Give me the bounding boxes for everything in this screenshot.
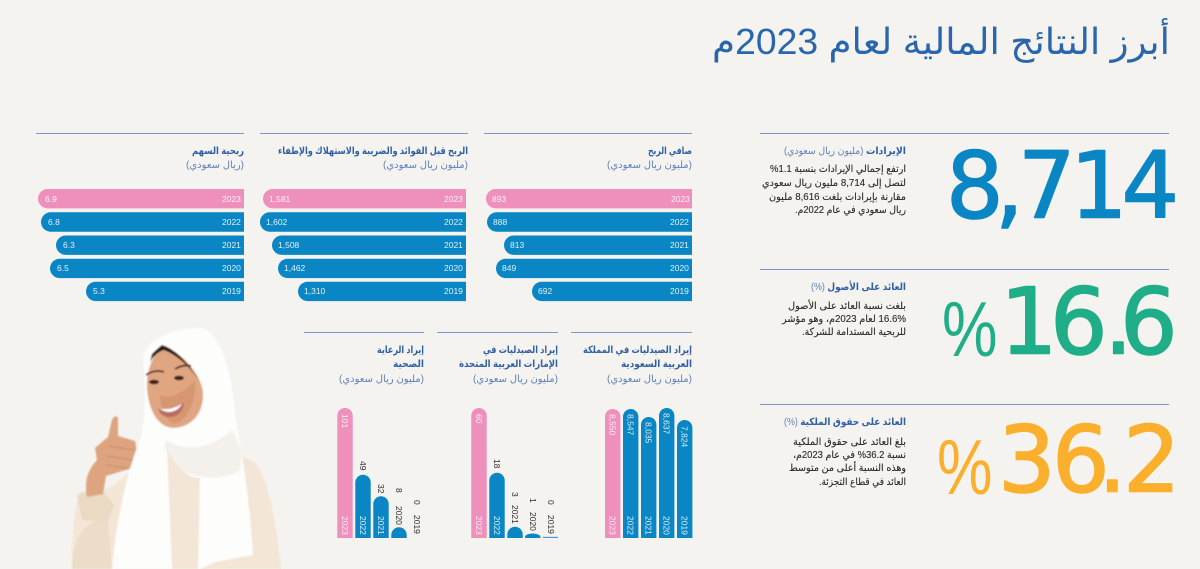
text block: return on assets bbox=[781, 299, 906, 338]
bar chart: UAE pharmacies revenue: 2020 bbox=[528, 512, 538, 531]
bar chart: EBITDA: 2023 bbox=[444, 194, 463, 204]
text block: return on equity bbox=[789, 437, 906, 488]
bar chart: UAE pharmacies revenue bbox=[471, 408, 558, 538]
bar chart: earnings per share: 6.3 bbox=[63, 240, 75, 250]
bar chart: KSA pharmacies revenue: 2020 bbox=[662, 516, 672, 535]
bar chart: UAE pharmacies revenue: 2023 bbox=[474, 516, 484, 535]
bar chart: KSA pharmacies revenue: 8,035 bbox=[644, 422, 654, 444]
panel: healthcare revenue: الصحية bbox=[393, 359, 424, 370]
bar chart: EBITDA: 2022 bbox=[444, 217, 463, 227]
bar chart: net profit: 893 bbox=[492, 194, 506, 204]
text block: return on equity: وهذه النسبة أعلى من متوسط bbox=[789, 461, 906, 474]
text block: return on equity: نسبة 36.2% في عام 2023م، bbox=[793, 450, 906, 461]
bar chart: earnings per share: 5.3 bbox=[93, 286, 105, 296]
bar chart: KSA pharmacies revenue bbox=[605, 408, 692, 538]
bar chart: KSA pharmacies revenue: 2023 bbox=[608, 516, 618, 535]
text block: revenue: لتصل إلى 8,714 مليون ريال سعودي bbox=[762, 178, 906, 189]
bar chart: UAE pharmacies revenue: 3 bbox=[510, 492, 520, 497]
bar chart: earnings per share bbox=[38, 189, 244, 301]
panel: KSA pharmacies revenue: (مليون ريال سعودي) bbox=[607, 374, 692, 385]
bar chart: net profit: 849 bbox=[502, 263, 516, 273]
bar chart: earnings per share: 2021 bbox=[222, 240, 241, 250]
bar chart: net profit: 692 bbox=[538, 286, 552, 296]
text block: return on assets: 16.6% لعام 2023م، وهو مؤشر bbox=[781, 314, 906, 325]
bar chart: KSA pharmacies revenue: 2022 bbox=[626, 516, 636, 535]
text block: return on equity: العائد في قطاع التجزئة. bbox=[819, 477, 906, 488]
bar chart: UAE pharmacies revenue: 2021 bbox=[510, 505, 520, 524]
big number: return on equity: 36.2 bbox=[998, 406, 1181, 514]
heading: KSA pharmacies revenue: إيراد الصيدليات في المملكة bbox=[583, 345, 692, 356]
bar chart: net profit: 2022 bbox=[670, 217, 689, 227]
bar chart: KSA pharmacies revenue: 8,637 bbox=[662, 413, 672, 435]
text block: revenue bbox=[762, 164, 906, 216]
bar chart: earnings per share: 6.8 bbox=[48, 217, 60, 227]
panel: UAE pharmacies revenue: (مليون ريال سعودي) bbox=[473, 374, 558, 385]
bar chart: net profit: 2019 bbox=[670, 286, 689, 296]
bar chart: earnings per share: 6.9 bbox=[45, 194, 57, 204]
panel: net profit bbox=[484, 134, 692, 301]
big number: return on assets: % bbox=[942, 285, 997, 373]
panel: UAE pharmacies revenue bbox=[437, 332, 558, 538]
panel: net profit: (مليون ريال سعودي) bbox=[607, 160, 692, 171]
bar chart: earnings per share: 6.5 bbox=[57, 263, 69, 273]
panel: healthcare revenue bbox=[304, 332, 424, 538]
bar chart: UAE pharmacies revenue: 1 bbox=[528, 498, 538, 503]
panel: return on assets KPI bbox=[760, 268, 1178, 376]
heading: EBITDA: الربح قبل الفوائد والضريبة والاستهلاك والإطفاء bbox=[278, 146, 468, 157]
bar chart: UAE pharmacies revenue: 60 bbox=[474, 414, 484, 424]
bar chart: net profit: 2021 bbox=[670, 240, 689, 250]
bar chart: EBITDA bbox=[260, 189, 466, 301]
panel: UAE pharmacies revenue: الإمارات العربية المتحدة bbox=[459, 359, 558, 370]
bar chart: healthcare revenue: 2021 bbox=[376, 516, 386, 535]
bar chart: earnings per share: 2023 bbox=[222, 194, 241, 204]
panel: healthcare revenue: (مليون ريال سعودي) bbox=[339, 374, 424, 385]
bar chart: KSA pharmacies revenue: 2019 bbox=[680, 516, 690, 535]
heading: earnings per share: ربحية السهم bbox=[192, 146, 244, 157]
panel: earnings per share bbox=[36, 134, 244, 301]
bar chart: healthcare revenue: 0 bbox=[412, 500, 422, 505]
bar chart: EBITDA: 2021 bbox=[444, 240, 463, 250]
title: أبرز النتائج المالية لعام 2023م bbox=[712, 18, 1170, 63]
big number: return on assets: 16.6 bbox=[1000, 268, 1178, 376]
bar chart: earnings per share: 2019 bbox=[222, 286, 241, 296]
bar chart: EBITDA: 1,462 bbox=[284, 263, 306, 273]
bar chart: KSA pharmacies revenue: 2021 bbox=[644, 516, 654, 535]
bar chart: earnings per share: 2022 bbox=[222, 217, 241, 227]
bar chart: net profit: 888 bbox=[493, 217, 507, 227]
heading: return on assets: العائد على الأصول (%) bbox=[811, 280, 906, 293]
text block: revenue: ارتفع إجمالي الإيرادات بنسبة 1.1% bbox=[770, 164, 906, 175]
bar chart: UAE pharmacies revenue: 2022 bbox=[492, 516, 502, 535]
big number: return on equity: % bbox=[937, 423, 992, 511]
text block: revenue: مقارنة بإيرادات بلغت 8,616 مليون bbox=[769, 192, 906, 203]
bar chart: healthcare revenue bbox=[337, 408, 422, 538]
panel: return on equity KPI bbox=[760, 404, 1181, 514]
bar chart: earnings per share: 2020 bbox=[222, 263, 241, 273]
bar chart: KSA pharmacies revenue: 8,547 bbox=[626, 414, 636, 436]
bar chart: net profit: 2023 bbox=[671, 194, 690, 204]
text block: return on equity: بلغ العائد على حقوق الملكية bbox=[793, 437, 906, 448]
bar chart: EBITDA: 1,581 bbox=[269, 194, 291, 204]
bar chart: KSA pharmacies revenue: 8,550 bbox=[608, 414, 618, 436]
heading: healthcare revenue: إيراد الرعاية bbox=[377, 345, 424, 356]
bar chart: net profit bbox=[486, 189, 692, 301]
bar chart: EBITDA: 1,602 bbox=[266, 217, 288, 227]
bar chart: net profit: 2020 bbox=[670, 263, 689, 273]
panel: EBITDA: (مليون ريال سعودي) bbox=[383, 160, 468, 171]
heading: net profit: صافي الربح bbox=[648, 146, 692, 157]
bar chart: EBITDA: 2020 bbox=[444, 263, 463, 273]
bar chart: EBITDA: 2019 bbox=[444, 286, 463, 296]
panel: KSA pharmacies revenue bbox=[571, 332, 692, 538]
text block: return on assets: بلغت نسبة العائد على الأصول bbox=[788, 299, 906, 312]
big number: revenue: 8,714 bbox=[946, 132, 1179, 240]
bar chart: healthcare revenue: 2019 bbox=[412, 515, 422, 534]
bar chart: UAE pharmacies revenue: 0 bbox=[546, 500, 556, 505]
bar chart: EBITDA: 1,310 bbox=[304, 286, 326, 296]
panel: EBITDA bbox=[260, 134, 468, 301]
bar chart: UAE pharmacies revenue: 2019 bbox=[546, 515, 556, 534]
bar chart: EBITDA: 1,508 bbox=[278, 240, 300, 250]
bar chart: healthcare revenue: 49 bbox=[358, 461, 368, 471]
panel: revenue KPI bbox=[760, 132, 1179, 240]
panel: KSA pharmacies revenue: العربية السعودية bbox=[621, 359, 692, 370]
bar chart: net profit: 813 bbox=[510, 240, 524, 250]
text block: revenue: ريال سعودي في عام 2022م. bbox=[795, 205, 906, 216]
illustration: smiling woman giving thumbs up bbox=[72, 328, 281, 569]
bar chart: UAE pharmacies revenue: 18 bbox=[492, 459, 502, 469]
bar chart: healthcare revenue: 2022 bbox=[358, 516, 368, 535]
heading: UAE pharmacies revenue: إيراد الصيدليات في bbox=[483, 345, 558, 356]
bar chart: KSA pharmacies revenue: 7,824 bbox=[680, 426, 690, 448]
bar chart: healthcare revenue: 101 bbox=[340, 414, 350, 428]
heading: revenue: الإيرادات (مليون ريال سعودي) bbox=[784, 146, 906, 157]
bar chart: healthcare revenue: 32 bbox=[376, 484, 386, 494]
bar chart: healthcare revenue: 2020 bbox=[394, 506, 404, 525]
bar chart: healthcare revenue: 8 bbox=[394, 488, 404, 493]
heading: return on equity: العائد على حقوق الملكية (%) bbox=[784, 417, 906, 428]
text block: return on assets: للربحية المستدامة للشركة. bbox=[802, 327, 906, 338]
bar chart: healthcare revenue: 2023 bbox=[340, 516, 350, 535]
panel: earnings per share: (ريال سعودي) bbox=[186, 160, 244, 171]
